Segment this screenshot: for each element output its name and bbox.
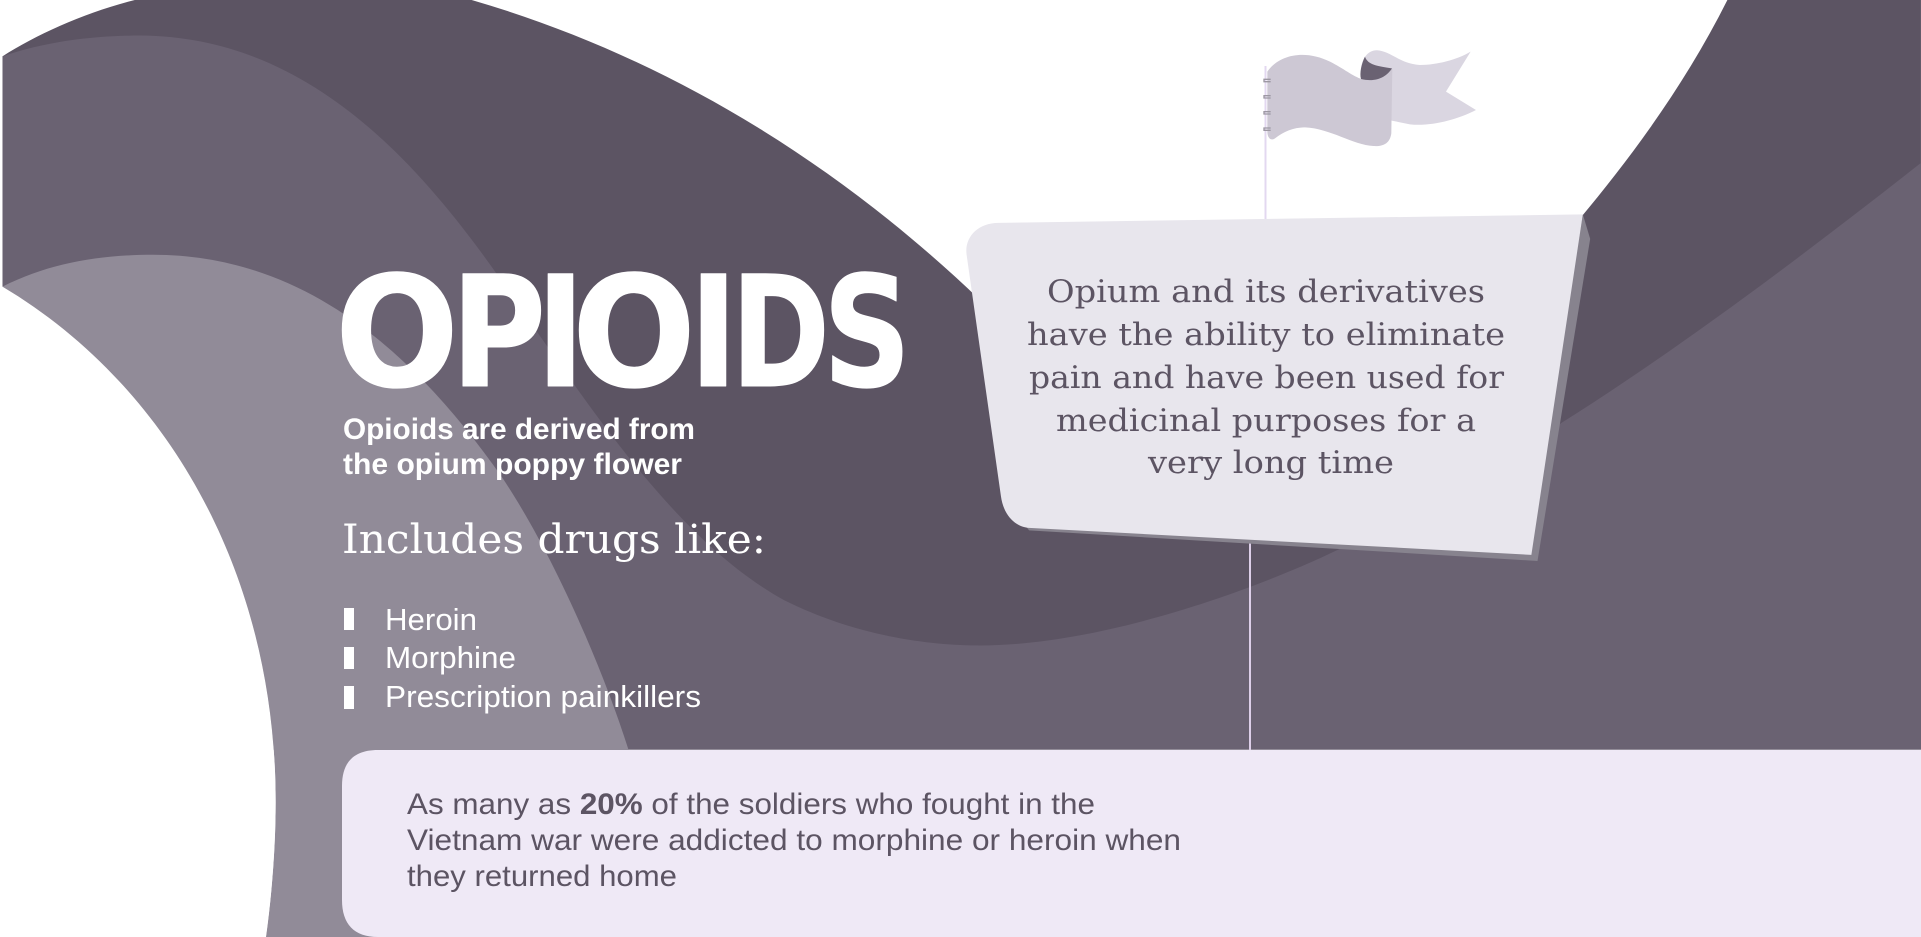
subtitle line 1: Opioids are derived from [343, 413, 695, 446]
panel line 1: Opium and its derivatives [1047, 274, 1485, 310]
title: I [536, 244, 585, 423]
subtitle line 2: the opium poppy flower [343, 448, 682, 481]
title: P [451, 244, 546, 423]
light wave [2, 255, 649, 937]
title: O [572, 244, 696, 423]
flag front section [1267, 55, 1392, 146]
band text [407, 788, 1181, 893]
band line 3: they returned home [407, 860, 677, 893]
bullet: heroin [344, 608, 354, 630]
item: prescription painkillers: Prescription painkillers [385, 679, 701, 714]
dark wave [2, 0, 1921, 750]
list heading: Includes drugs like: [342, 517, 766, 563]
title: D [731, 244, 830, 423]
panel: opium callout [966, 214, 1590, 561]
panel shadow [1017, 214, 1590, 561]
panel text [1027, 274, 1505, 481]
panel: statistic band [342, 750, 1921, 937]
flag pole [1264, 66, 1266, 220]
bullet: morphine [344, 647, 354, 669]
panel line 4: medicinal purposes for a [1056, 403, 1476, 439]
white cut-out [0, 0, 276, 937]
flag back section [1361, 50, 1476, 125]
item: morphine: Morphine [385, 640, 516, 675]
band line 2: Vietnam war were addicted to morphine or heroin when [407, 824, 1181, 857]
flag fold [1360, 57, 1392, 80]
medium wave [2, 36, 1921, 750]
panel line 3: pain and have been used for [1029, 360, 1504, 396]
bullet: prescription painkillers [344, 686, 354, 709]
connector line [1249, 535, 1251, 750]
subtitle [343, 413, 695, 481]
panel face [966, 214, 1583, 555]
item: heroin: Heroin [385, 602, 477, 637]
panel line 2: have the ability to eliminate [1027, 317, 1505, 353]
icon: flag [1264, 50, 1476, 146]
title: I [689, 244, 738, 423]
band background [342, 750, 1921, 937]
panel line 5: very long time [1147, 445, 1394, 481]
flag rings [1264, 79, 1271, 130]
drug list [344, 602, 701, 714]
band line 1: As many as 20% of the soldiers who fought in the [407, 788, 1095, 821]
title: S [823, 244, 911, 423]
title: O [335, 244, 459, 423]
